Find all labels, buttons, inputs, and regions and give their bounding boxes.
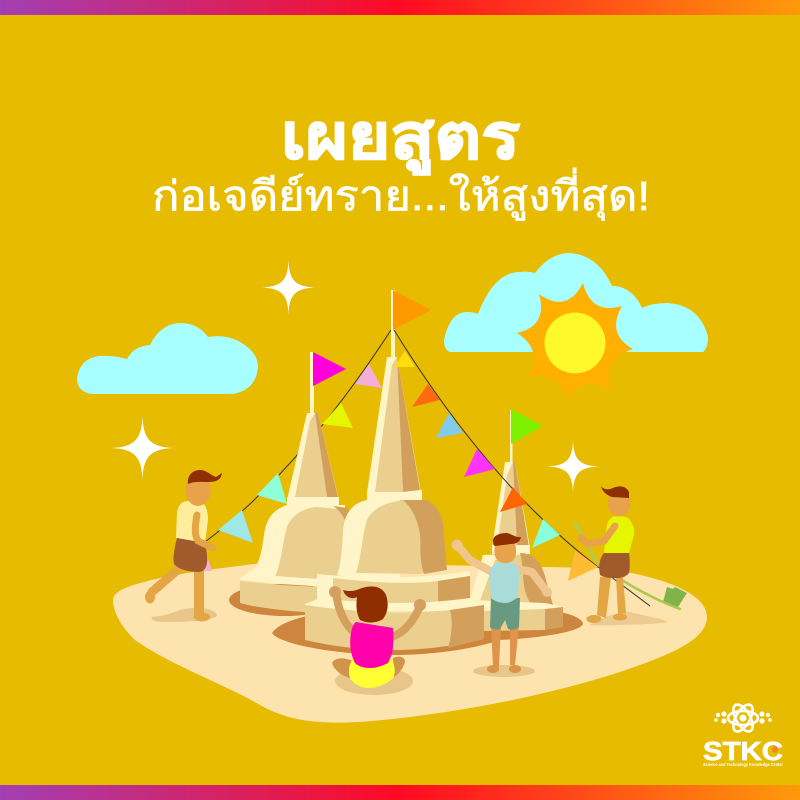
person: walking boy [145, 470, 222, 622]
logo wordmark: STKC [703, 736, 783, 766]
ground shadow left stupa [229, 584, 341, 616]
person: boy with broom [575, 486, 687, 625]
person: boy in blue shirt [452, 533, 552, 677]
cloud left [77, 323, 258, 394]
title: ก่อเจดีย์ทราย...ให้สูงที่สุด! [152, 168, 650, 221]
logo tagline: Science and Technology Knowledge Center [703, 762, 783, 767]
logo STKC [703, 702, 783, 767]
stupa left [240, 352, 352, 613]
bunting left flags [218, 364, 382, 543]
ground shadow centre stupa [272, 612, 583, 655]
sparkle left [110, 415, 176, 481]
title: เผยสูตร [281, 103, 520, 175]
bunting left string [205, 330, 391, 542]
icon: atom [714, 702, 772, 734]
sparkle right [546, 440, 600, 494]
bunting right flags [394, 351, 598, 581]
stupa centre [305, 290, 484, 650]
stupa right [470, 409, 563, 631]
sparkle top [260, 260, 316, 316]
bottom gradient bar [0, 785, 800, 800]
sand island [113, 562, 707, 723]
title [152, 103, 650, 221]
person: sitting child [329, 586, 426, 695]
cloud right [444, 253, 708, 352]
top gradient bar [0, 0, 800, 15]
sun [517, 283, 633, 399]
bunting right string [394, 330, 650, 606]
